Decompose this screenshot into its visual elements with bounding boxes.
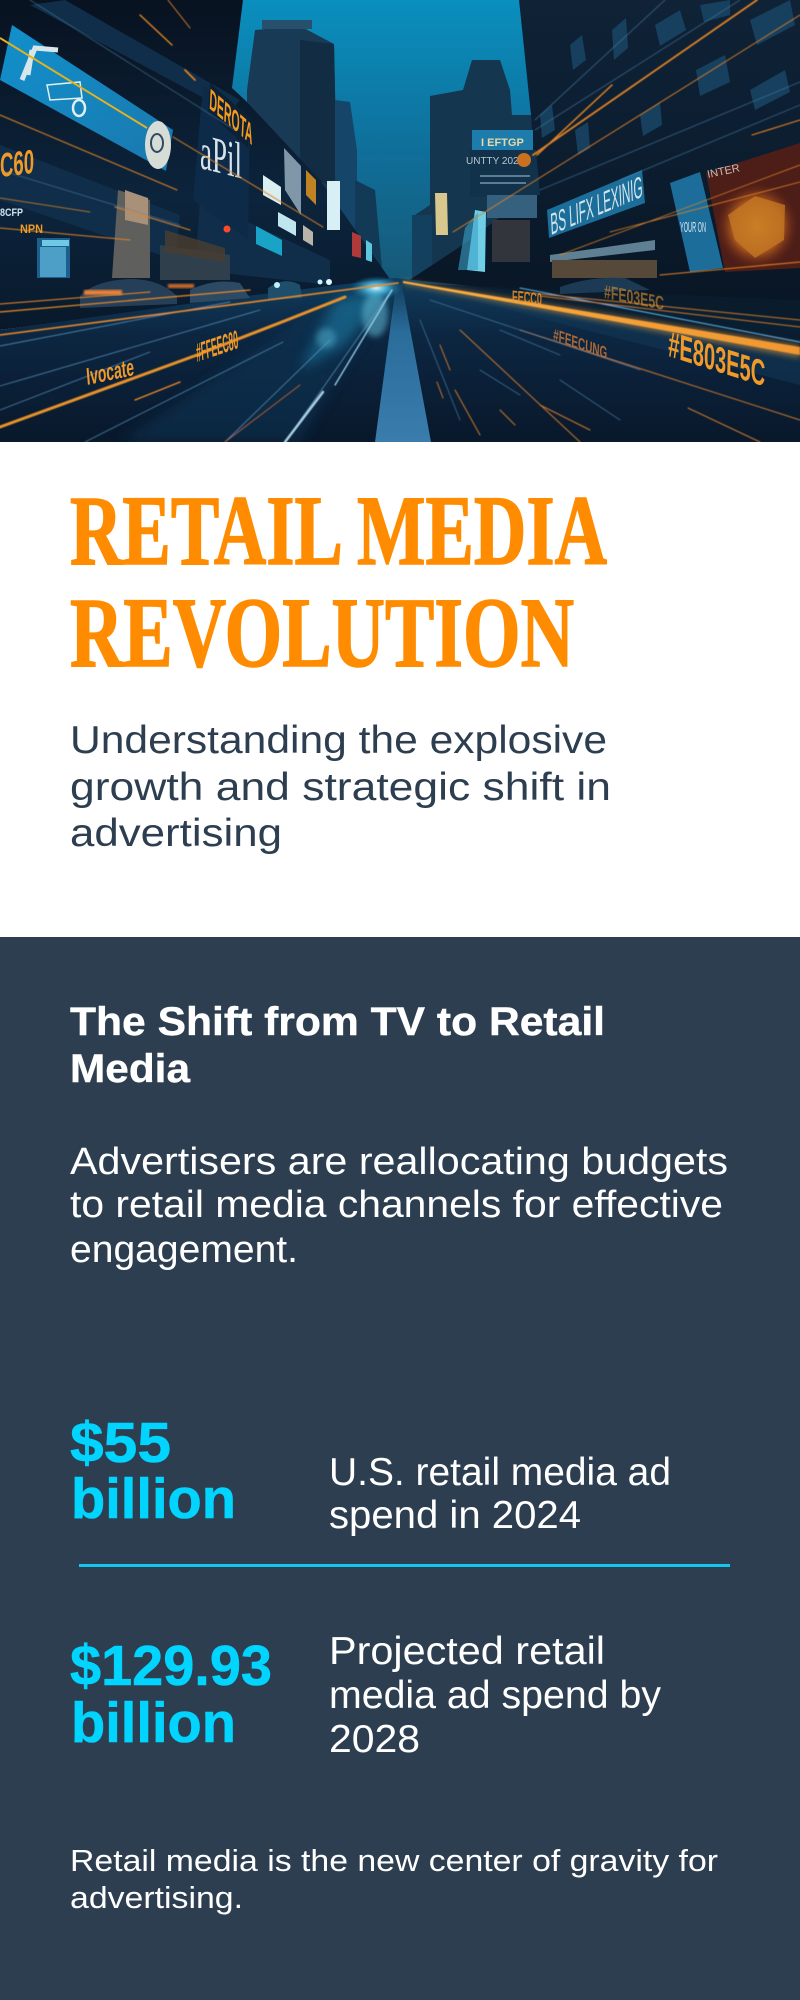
right building mass (402, 0, 800, 320)
right billboards: BS LIFX LEXINIG (550, 170, 643, 242)
orange road text: 8CFP (0, 207, 23, 219)
title: RETAIL MEDIA (70, 475, 607, 586)
left large billboard (0, 25, 173, 171)
panel: the shift from TV to retail media (0, 937, 800, 2000)
stat value (70, 1411, 236, 1531)
stat value (70, 1634, 272, 1755)
intro paragraph: engagement. (70, 1229, 298, 1271)
stat description (329, 1630, 661, 1761)
right billboards: YOUR ON (680, 219, 706, 235)
left road highlight (120, 280, 395, 442)
stat description: Projected retail (329, 1630, 605, 1673)
orange sign with script: DEROTA (209, 81, 254, 152)
road center strip (375, 285, 431, 442)
intro paragraph: Advertisers are reallocating budgets (70, 1141, 728, 1183)
orange road text: #FFEEC80 (195, 324, 239, 368)
right billboards (435, 130, 800, 278)
distant right towers (412, 60, 536, 290)
right building windows (540, 0, 795, 155)
cars (80, 278, 650, 308)
stat value: billion (71, 1691, 236, 1755)
orange sign with script (193, 81, 254, 240)
orange road text: Ivocate (85, 353, 135, 390)
stat description: U.S. retail media ad (329, 1451, 671, 1494)
closing statement: advertising. (70, 1880, 243, 1915)
intro paragraph: to retail media channels for effective (70, 1184, 723, 1226)
cyan divider (79, 1564, 730, 1567)
street light trails (0, 0, 800, 442)
section heading: Media (70, 1047, 191, 1091)
building light trails (0, 0, 800, 275)
orange road text: #E803E5C (668, 323, 766, 395)
section heading (70, 1000, 605, 1091)
orange sign with script: aPil (200, 124, 242, 190)
right billboards: I EFTGP (481, 137, 524, 149)
orange road text: #FE03E5C (604, 281, 664, 314)
right billboards: UNTTY 2021 (466, 156, 525, 167)
subtitle (70, 719, 611, 855)
wet road light glow (350, 276, 402, 300)
sky (0, 0, 800, 300)
road surface (0, 278, 800, 442)
orange road text: FECC0 (512, 288, 542, 309)
orange road text: #FEECUNG (553, 326, 608, 363)
title (70, 475, 608, 688)
subtitle: advertising (70, 812, 282, 855)
left building mass (0, 0, 392, 330)
orange road text (0, 144, 766, 395)
stat description: media ad spend by (329, 1674, 661, 1717)
left street screens (256, 148, 372, 262)
subtitle: growth and strategic shift in (70, 766, 611, 809)
intro paragraph (70, 1141, 728, 1271)
hero image: neon city street at night (0, 0, 800, 442)
title: REVOLUTION (70, 577, 574, 688)
stat: $55 billion (70, 1411, 671, 1537)
closing statement: Retail media is the new center of gravity for (70, 1843, 718, 1878)
left building facade bands (0, 0, 330, 285)
stat description: spend in 2024 (329, 1494, 581, 1537)
stat description: 2028 (329, 1718, 420, 1761)
right billboards: INTER (706, 162, 741, 181)
stat value: $129.93 (70, 1634, 272, 1698)
section heading: The Shift from TV to Retail (70, 1000, 605, 1044)
distant left towers (247, 20, 383, 280)
stat value: billion (71, 1467, 236, 1531)
orange road text: NPN (20, 222, 43, 236)
subtitle: Understanding the explosive (70, 719, 607, 762)
right roadside band (403, 283, 800, 352)
orange road text: C60 (0, 144, 34, 185)
stat description (329, 1451, 671, 1537)
closing statement (70, 1843, 718, 1915)
panel: title block (0, 442, 800, 937)
stat: $129.93 billion (70, 1630, 661, 1761)
stat value: $55 (70, 1411, 171, 1475)
storefronts and doors (37, 190, 230, 280)
